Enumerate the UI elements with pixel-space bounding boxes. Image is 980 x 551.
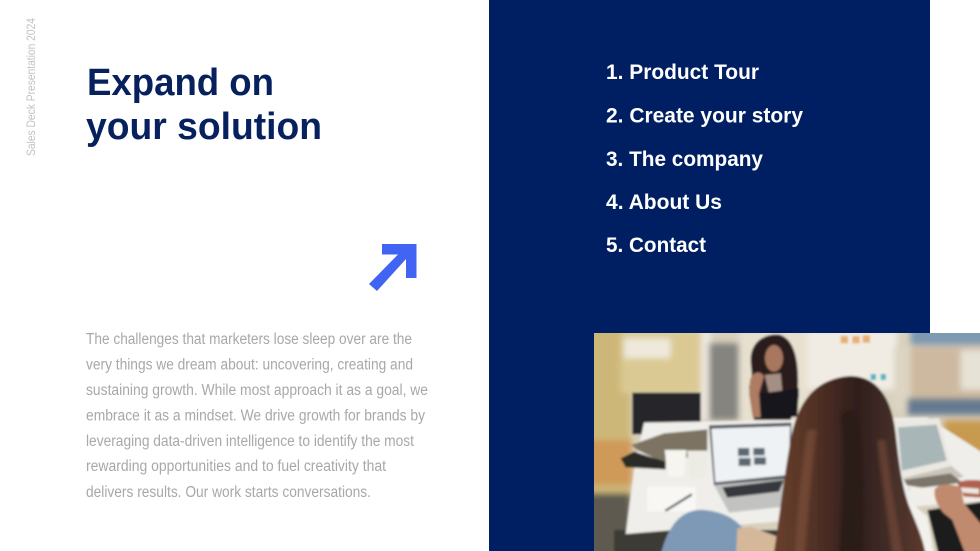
body text: leveraging data-driven intelligence to identify the most (86, 433, 415, 450)
body text: delivers results. Our work starts conversations. (86, 484, 371, 501)
foreground hair (772, 376, 927, 551)
white shirt (908, 506, 934, 551)
body text: The challenges that marketers lose sleep over are the (86, 331, 412, 348)
agenda list (606, 60, 803, 257)
agenda list: 4. About Us (606, 190, 722, 214)
body text: sustaining growth. While most approach it as a goal, we (86, 382, 428, 399)
floor below table (614, 530, 781, 551)
panel: navy agenda (489, 0, 930, 551)
body text (86, 331, 428, 501)
white table (626, 417, 980, 534)
title: your solution (86, 106, 322, 148)
notebook and pen (648, 488, 694, 510)
agenda list: 1. Product Tour (606, 60, 760, 84)
photo: team working on laptops (581, 320, 980, 551)
body text: embrace it as a mindset. We drive growth for brands by (86, 408, 425, 424)
bag (631, 429, 707, 463)
icon: arrow (369, 244, 416, 291)
body text: rewarding opportunities and to fuel creativity that (86, 458, 387, 475)
right laptop (896, 418, 951, 478)
agenda list: 2. Create your story (606, 104, 803, 128)
body text: very things we dream about: uncovering, creating and (86, 356, 413, 374)
agenda list: 5. Contact (606, 233, 706, 257)
right person (927, 500, 980, 551)
blurred woman in background (749, 335, 799, 420)
cups (663, 448, 688, 460)
jeans (659, 510, 744, 551)
agenda list: 3. The company (606, 147, 763, 171)
sticky notes (841, 335, 870, 343)
title: Expand on (87, 62, 274, 104)
chair (632, 393, 701, 434)
left laptop (709, 423, 791, 486)
title (86, 62, 322, 148)
